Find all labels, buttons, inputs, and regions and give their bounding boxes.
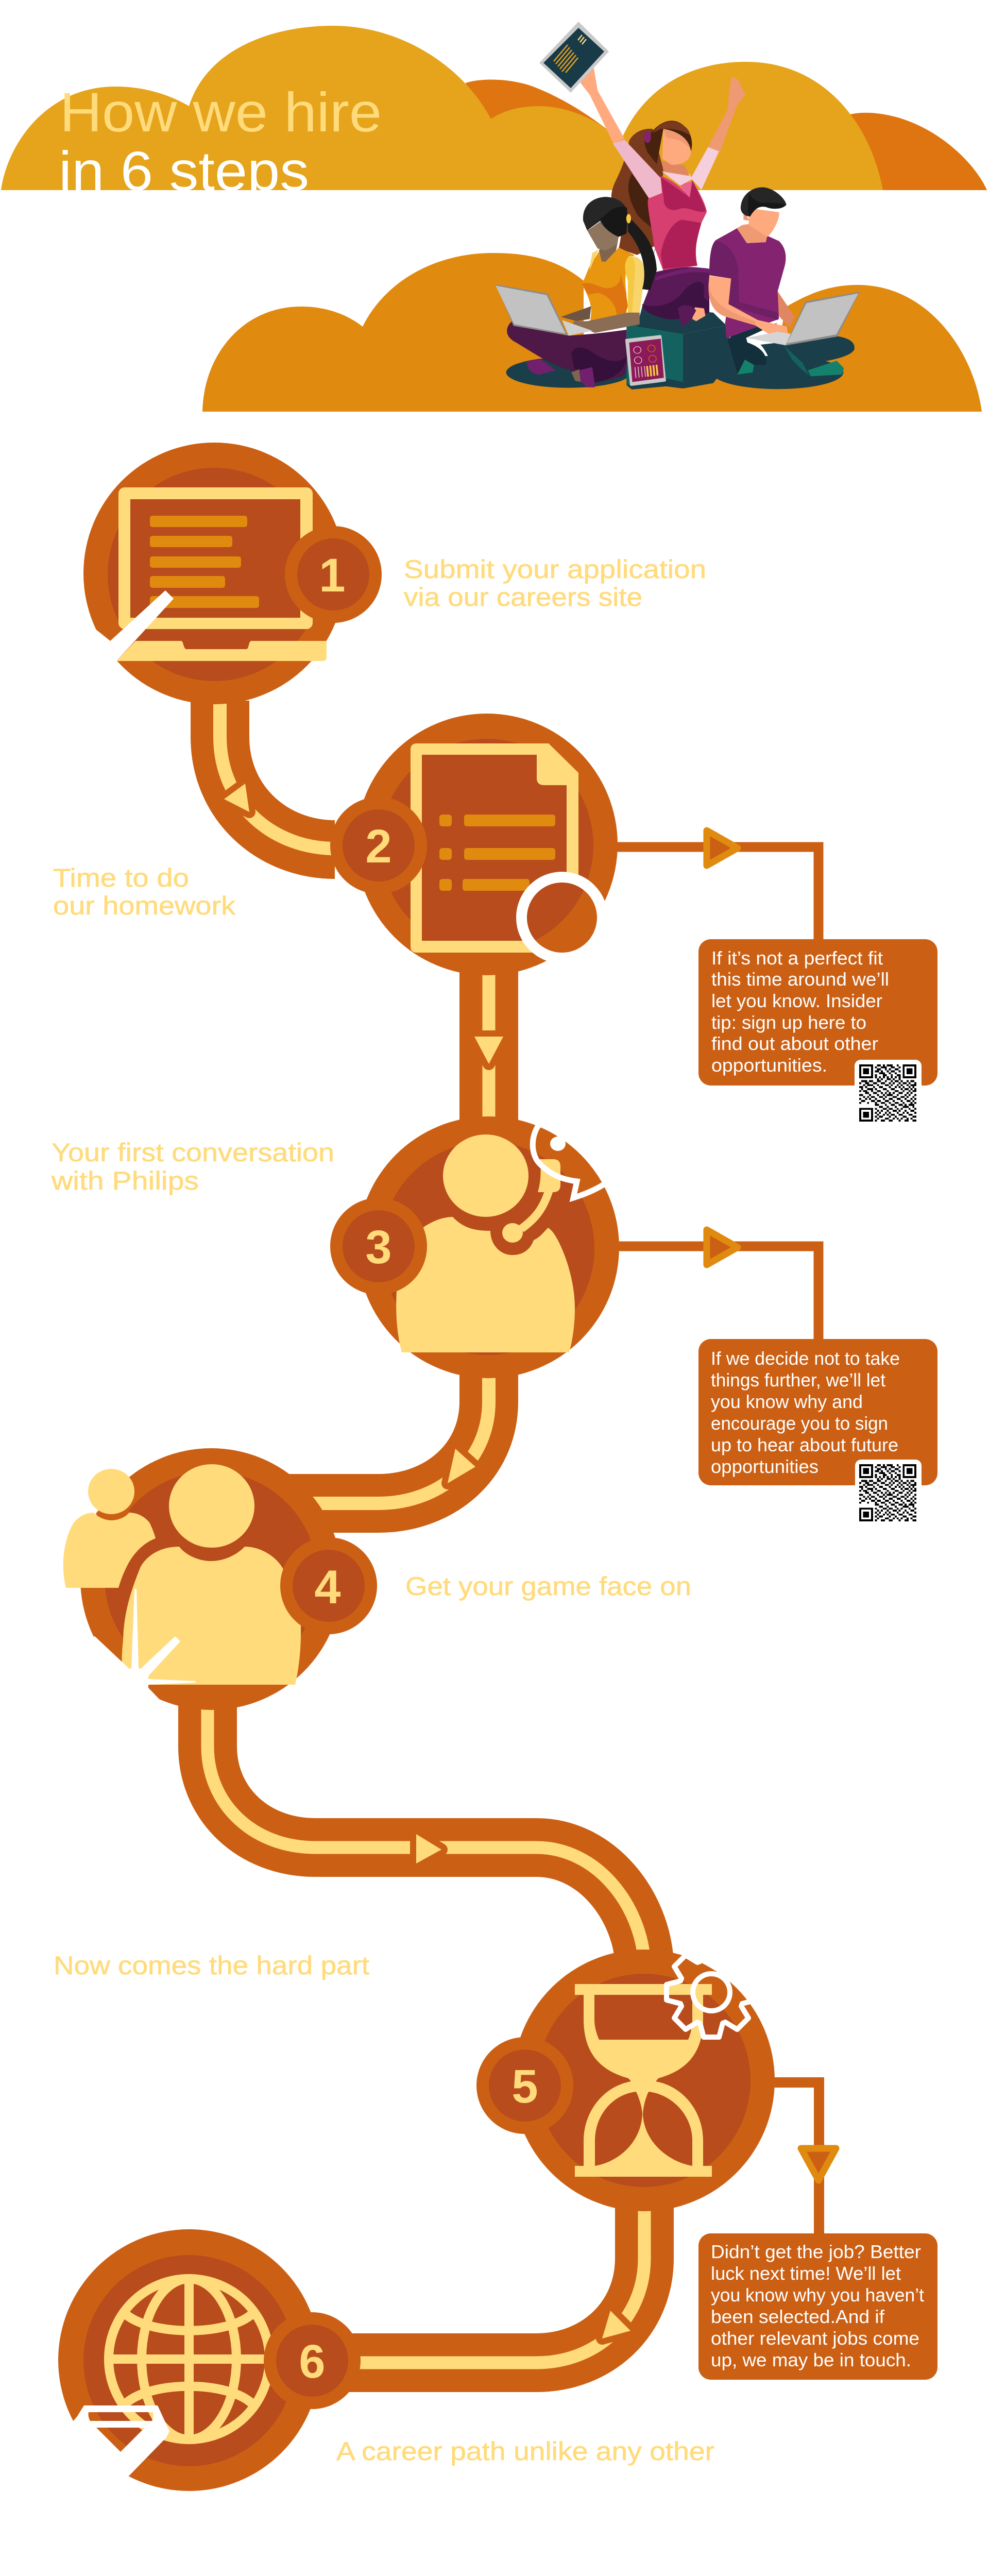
number badge: 4	[314, 1561, 341, 1614]
callout 2: things further, we’ll let	[711, 1369, 885, 1391]
callout 1: If it’s not a perfect fit	[711, 947, 883, 969]
icon: magnifier	[516, 872, 608, 963]
callout 1: let you know. Insider	[711, 990, 882, 1011]
ground shadows	[506, 356, 843, 389]
QR code	[855, 1060, 922, 1129]
seated woman: torso	[561, 247, 645, 333]
woman: legs	[642, 267, 709, 328]
icon: document	[411, 743, 578, 953]
cube seat	[626, 306, 737, 385]
number badge	[264, 2312, 361, 2409]
connector to callout 2	[616, 1230, 819, 1343]
arrow	[801, 2148, 836, 2180]
title line 1: How we hire	[60, 81, 382, 143]
label step 3: with Philips	[51, 1166, 199, 1195]
label step 5: Now comes the hard part	[54, 1951, 369, 1980]
circle	[356, 714, 618, 975]
callout 1: opportunities.	[711, 1055, 827, 1076]
icon: speech bubble	[533, 1124, 604, 1198]
seated woman: legs	[507, 320, 627, 387]
white funnel	[72, 2405, 169, 2477]
callout 3	[698, 2233, 937, 2380]
right laptop	[746, 292, 860, 346]
callout 2: If we decide not to take	[711, 1348, 900, 1369]
number badge: 5	[511, 2060, 538, 2113]
arrow	[707, 831, 738, 866]
number badge: 1	[319, 549, 346, 602]
icon: gear	[667, 1947, 756, 2037]
callout 2	[698, 1339, 937, 1529]
back cloud right	[850, 113, 987, 190]
woman: hair top and face	[644, 121, 692, 176]
icon: globe	[105, 2279, 271, 2439]
number badge	[280, 1537, 377, 1634]
woman: torso	[648, 171, 707, 271]
callout 3: you know why you haven’t	[711, 2284, 924, 2306]
icon: person with headset	[396, 1134, 575, 1352]
number badge	[330, 797, 427, 894]
arrow	[602, 2311, 630, 2338]
label step 4: Get your game face on	[405, 1572, 691, 1601]
step 5	[476, 1947, 775, 2211]
step 3	[330, 1116, 619, 1378]
QR code	[855, 1460, 922, 1529]
icon: small person	[63, 1469, 156, 1588]
woman: hair back	[611, 129, 663, 255]
label step 6: A career path unlike any other	[336, 2437, 714, 2466]
callout 3: Didn’t get the job? Better	[711, 2241, 921, 2262]
label step 3: Your first conversation	[52, 1138, 334, 1167]
callout 2: opportunities	[711, 1456, 819, 1477]
connector to callout 1	[613, 831, 819, 943]
icon: hourglass	[575, 1984, 712, 2177]
callout 1	[698, 939, 937, 1129]
label step 2: our homework	[53, 891, 236, 920]
path: step 2 to step 3	[474, 969, 503, 1123]
label step 1: via our careers site	[404, 583, 642, 612]
callout 2: up to hear about future	[711, 1434, 898, 1455]
callout 3: been selected.And if	[711, 2306, 885, 2327]
number badge: 6	[299, 2335, 326, 2388]
circle	[58, 2229, 320, 2491]
man: legs	[728, 324, 855, 376]
lower tablet	[626, 336, 664, 385]
arrow	[448, 1449, 475, 1483]
back cloud left	[466, 79, 613, 190]
raised tablet	[539, 22, 609, 93]
step 4	[63, 1448, 377, 1723]
step 1	[83, 443, 382, 704]
circle	[83, 443, 345, 704]
circle	[357, 1116, 619, 1378]
seated woman: head and braids	[583, 197, 657, 290]
number badge: 2	[365, 820, 392, 873]
title line 2: in 6 steps	[59, 140, 309, 202]
icon: laptop	[116, 487, 327, 661]
callout 1: find out about other	[711, 1033, 878, 1054]
left laptop	[496, 284, 592, 336]
icon: main person	[122, 1464, 301, 1685]
man: torso and head	[708, 188, 795, 338]
connector to callout 3	[770, 2082, 836, 2236]
white burst	[77, 1589, 196, 1723]
label step 1: Submit your application	[404, 555, 706, 584]
step 2	[330, 714, 618, 975]
number badge: 3	[365, 1221, 392, 1274]
callout 3: luck next time! We’ll let	[711, 2263, 901, 2284]
number badge	[330, 1198, 427, 1295]
lower cloud	[202, 253, 982, 412]
woman: sleeve	[613, 140, 662, 198]
callout 1: tip: sign up here to	[711, 1012, 866, 1033]
label step 2: Time to do	[53, 863, 189, 892]
path: step 5 to step 6	[309, 2200, 644, 2363]
header: clouds and title	[1, 26, 987, 412]
label step 1	[404, 555, 706, 612]
path: step 1 to step 2	[220, 701, 335, 850]
callout 3: up, we may be in touch.	[711, 2349, 911, 2370]
arrow	[474, 1037, 503, 1064]
front cloud	[1, 26, 883, 190]
circle	[80, 1448, 342, 1710]
callout 3: other relevant jobs come	[711, 2328, 919, 2349]
step 6	[58, 2229, 361, 2491]
circle	[513, 1950, 775, 2211]
callout 2: you know why and	[711, 1391, 863, 1412]
arrow	[416, 1834, 441, 1863]
arrow	[707, 1230, 738, 1265]
label step 2	[53, 863, 236, 920]
callout 1: this time around we’ll	[711, 969, 889, 990]
white slash	[93, 590, 174, 661]
raised tablet arm and sleeves	[581, 61, 745, 190]
callout 2: encourage you to sign	[711, 1413, 888, 1434]
number badge	[285, 526, 382, 623]
number badge	[476, 2037, 573, 2134]
label step 3	[51, 1138, 334, 1195]
arrow	[224, 784, 249, 812]
path: step 3 to step 4	[258, 1370, 489, 1503]
illustration: three people with laptops	[496, 61, 860, 389]
path: step 4 to step 5	[208, 1700, 644, 1963]
